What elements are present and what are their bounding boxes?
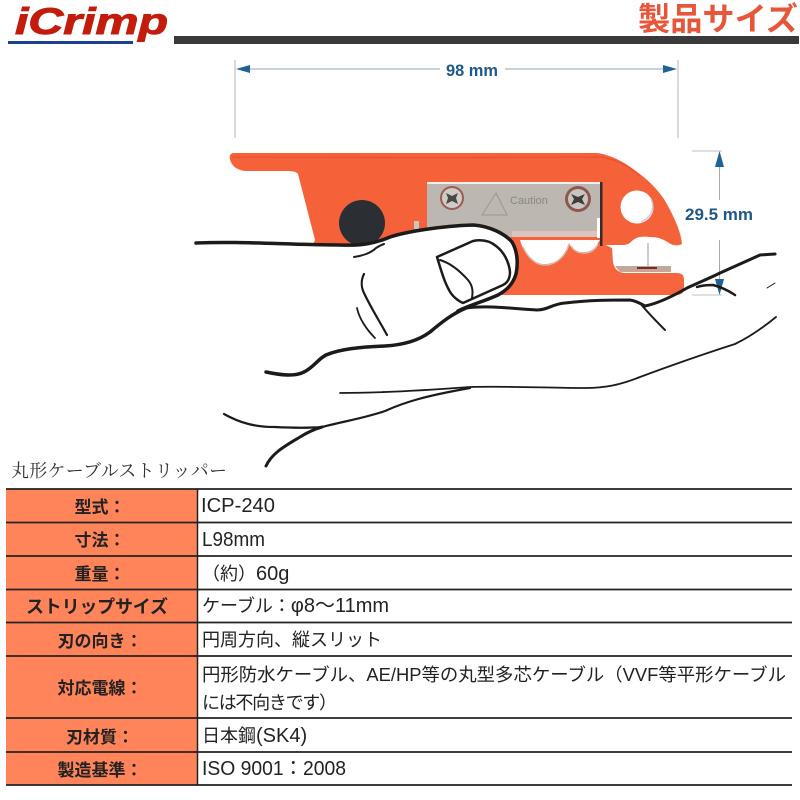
row: strip size: ストリップサイズ (26, 596, 168, 617)
row: model: 型式： (74, 498, 126, 517)
row: weight: 重量： (74, 565, 126, 584)
steel blade (427, 182, 602, 246)
product: cable stripper tool (230, 153, 684, 295)
jaw silver plate (615, 266, 671, 272)
hand line drawing (195, 225, 776, 466)
top outline and thumb contour (196, 225, 517, 311)
row: compatible cables (58, 664, 786, 713)
wrist line (224, 388, 470, 428)
row: blade material: 刃材質： (66, 728, 134, 747)
finger crease short (357, 308, 375, 338)
hand white fill (195, 225, 517, 360)
row: compatible cables: 対応電線： (58, 679, 142, 698)
small clip by blade (414, 221, 419, 229)
label column fill (6, 489, 197, 785)
row: dimensions (74, 529, 265, 551)
row: weight: （約）60g (202, 563, 289, 585)
row: blade direction (58, 630, 382, 651)
jaw slit pin (647, 243, 649, 268)
row: manufacturing standard: ISO 9001：2008 (202, 758, 346, 780)
row: strip size (26, 595, 389, 617)
logo: iCrimp (8, 1, 168, 44)
title: 製品サイズ (638, 1, 798, 37)
thumbnail (437, 240, 510, 303)
row: blade direction: 刃の向き： (58, 632, 142, 651)
forearm upper line (266, 308, 466, 375)
specification table (6, 489, 792, 785)
knuckle crease (354, 244, 384, 257)
wire hole (620, 190, 654, 224)
dimension: width 98 mm (235, 60, 678, 138)
lower line to the right across the palm (466, 254, 775, 310)
row: manufacturing standard (58, 758, 346, 780)
tool body (230, 153, 682, 250)
black thumb button (339, 200, 385, 246)
table rules (6, 489, 792, 785)
header (8, 1, 799, 44)
caution label: Caution (510, 195, 548, 207)
subtitle: 丸形ケーブルストリッパー (11, 461, 227, 481)
row: manufacturing standard: 製造基準： (58, 760, 142, 780)
row: strip size: ケーブル：φ8～11mm (202, 595, 389, 617)
header rule (174, 36, 799, 44)
row: blade material: 日本鋼(SK4) (202, 725, 307, 747)
lower jaw (500, 240, 684, 295)
row: dimensions: 寸法： (74, 531, 126, 550)
nail inner curve (440, 260, 473, 298)
palm crease right (697, 285, 735, 295)
row: blade direction: 円周方向、縦スリット (202, 630, 382, 650)
row: compatible cables: 円形防水ケーブル、AE/HP等の丸型多芯ケーブル（VVF等平形ケーブル (202, 664, 786, 685)
row: dimensions: L98mm (202, 529, 265, 551)
logo: iCrimp: iCrimp (15, 1, 168, 42)
row: weight (74, 563, 289, 585)
top highlight (232, 157, 640, 176)
finger crease (362, 274, 387, 335)
dimension: height 29.5 mm: 29.5 mm (685, 205, 753, 224)
jaw opening white (520, 240, 600, 264)
caution triangle mark (482, 193, 507, 215)
dimension: width 98 mm: 98 mm (446, 61, 498, 80)
wrist branch (266, 427, 322, 466)
row: compatible cables: には不向きです） (202, 693, 337, 713)
left screw (440, 186, 464, 210)
row: blade material (66, 725, 307, 747)
arm contour (340, 317, 776, 393)
dimension: height 29.5 mm (685, 151, 753, 295)
row: model: ICP-240 (201, 495, 275, 517)
small wrist tick (767, 283, 775, 288)
row: model (74, 495, 275, 517)
right screw (565, 186, 591, 212)
palm crease lower (640, 303, 665, 330)
